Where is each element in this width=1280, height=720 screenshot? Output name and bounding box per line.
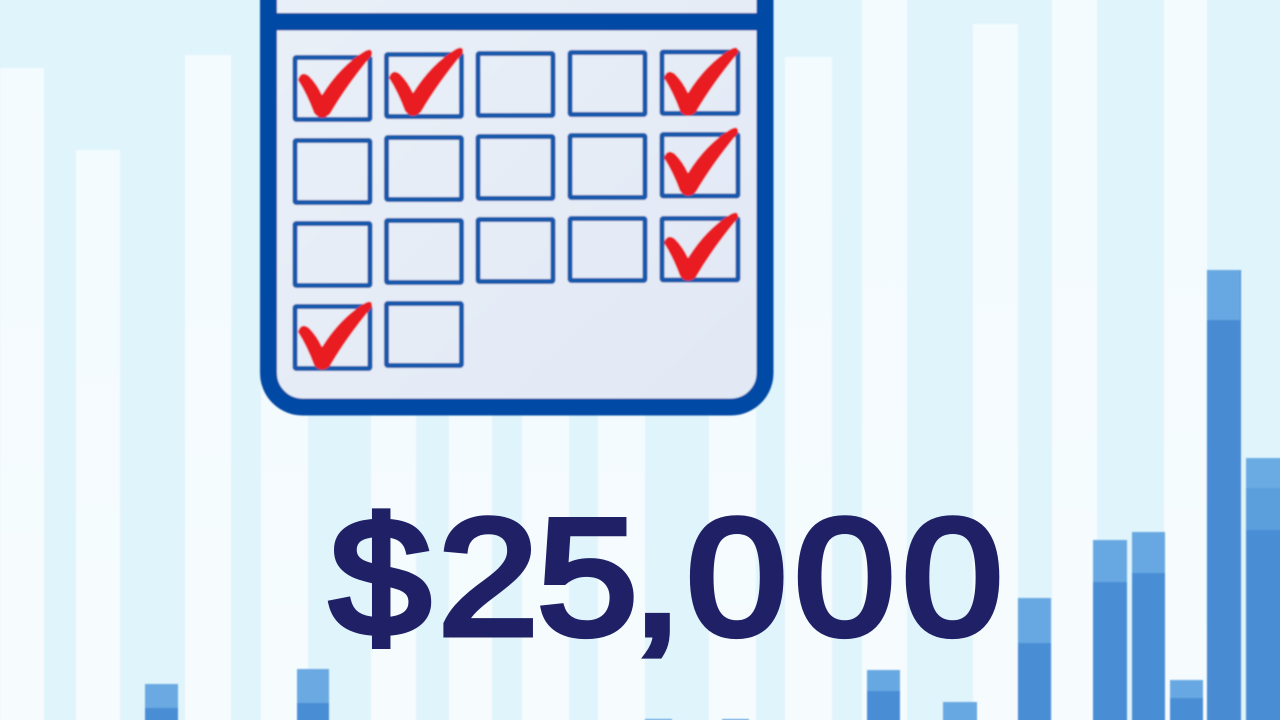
amount heading: $25,000: [330, 485, 1003, 669]
calendar checkbox grid: [295, 52, 738, 368]
calendar icon: [268, 0, 765, 407]
calendar body: [268, 0, 765, 407]
foreground blue bar chart: [145, 270, 1280, 720]
calendar header bar: [268, 13, 765, 30]
red check marks: [298, 48, 738, 370]
